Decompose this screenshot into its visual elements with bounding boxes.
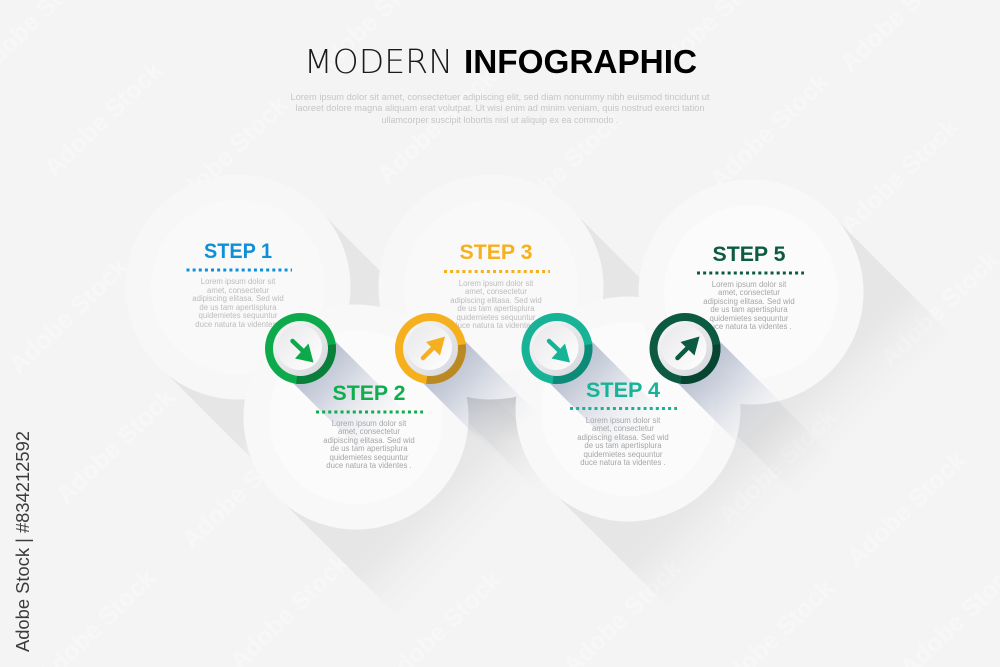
step 4 text xyxy=(570,379,677,467)
panel: step 1 circle xyxy=(126,174,350,400)
step 3 text: Lorem ipsum dolor sit xyxy=(459,279,534,288)
step 2 text: adipiscing elitasa. Sed wid xyxy=(323,436,415,445)
watermark pattern: Adobe Stock xyxy=(164,91,293,217)
step 5 text: Lorem ipsum dolor sit xyxy=(712,280,787,289)
step 1 text: de us tam apertisplura xyxy=(199,303,277,312)
title: MODERN xyxy=(304,42,453,81)
step 5 text: adipiscing elitasa. Sed wid xyxy=(703,297,795,306)
step 5 text: amet, consectetur xyxy=(718,288,780,297)
icon: step 3 yellow arrow button xyxy=(395,313,466,384)
step 2 text: amet, consectetur xyxy=(338,427,400,436)
step 4 text: Lorem ipsum dolor sit xyxy=(586,416,661,425)
subtitle text: Lorem ipsum dolor sit amet, consectetuer adipiscing elit, sed diam nonummy nibh euismod tincidunt ut xyxy=(290,92,710,102)
panel: step 2 circle xyxy=(244,304,468,530)
title: INFOGRAPHIC xyxy=(464,43,697,80)
step 2 text: STEP 2 xyxy=(332,382,406,405)
watermark pattern: Adobe Stock xyxy=(51,383,180,509)
step 3 text: duce natura ta videntes . xyxy=(453,321,539,330)
step 5 text: de us tam apertisplura xyxy=(710,305,788,314)
subtitle text: laoreet dolore magna aliquam erat volutpat. Ut wisi enim ad minim veniam, quis nostrud exerci tation xyxy=(296,103,704,113)
watermark pattern: Adobe Stock xyxy=(4,253,133,379)
panel: step 3 circle xyxy=(378,174,604,400)
subtitle text xyxy=(290,92,710,125)
step 3 text: STEP 3 xyxy=(460,241,532,264)
watermark pattern: Adobe Stock xyxy=(713,403,842,529)
step 1 text: adipiscing elitasa. Sed wid xyxy=(192,294,284,303)
step 4 text: adipiscing elitasa. Sed wid xyxy=(577,433,669,442)
step 4 text: duce natura ta videntes . xyxy=(580,458,666,467)
watermark pattern: Adobe Stock xyxy=(177,428,306,554)
vertical stock id text: Adobe Stock | #834212592 xyxy=(13,431,33,652)
panel: step 4 circle xyxy=(516,296,740,522)
watermark pattern: Adobe Stock xyxy=(705,68,834,194)
step 1 text: duce natura ta videntes . xyxy=(195,320,281,329)
step 1 text: Lorem ipsum dolor sit xyxy=(201,277,276,286)
icon: step 1 green arrow button xyxy=(265,313,336,384)
watermark pattern: Adobe Stock xyxy=(835,113,964,239)
step 2 text: quidemietes sequuntur xyxy=(330,453,409,462)
step 1 text xyxy=(186,240,292,329)
step 5 text xyxy=(697,243,804,331)
step 3 text: amet, consectetur xyxy=(465,287,527,296)
step 2 text: de us tam apertisplura xyxy=(330,444,408,453)
step 1 text: STEP 1 xyxy=(204,240,272,263)
step 4 text: quidemietes sequuntur xyxy=(584,450,663,459)
step 3 text: de us tam apertisplura xyxy=(457,304,535,313)
icon: step 5 dark green arrow button xyxy=(650,313,720,384)
step 2 text xyxy=(316,382,423,470)
title xyxy=(304,42,697,81)
step 4 text: de us tam apertisplura xyxy=(584,441,662,450)
step 3 text xyxy=(444,241,550,330)
panel: step 5 circle xyxy=(638,180,864,404)
step 5 text: quidemietes sequuntur xyxy=(710,314,789,323)
step 4 text: STEP 4 xyxy=(586,379,660,402)
step 5 text: STEP 5 xyxy=(712,243,786,266)
step 4 text: amet, consectetur xyxy=(592,424,654,433)
watermark pattern: Adobe Stock xyxy=(372,63,501,189)
long shadows behind circles xyxy=(159,208,961,627)
step 1 text: amet, consectetur xyxy=(207,286,269,295)
step 2 text: duce natura ta videntes . xyxy=(326,461,412,470)
step 2 text: Lorem ipsum dolor sit xyxy=(332,419,407,428)
step 5 text: duce natura ta videntes . xyxy=(706,322,792,331)
long shadows behind arrow buttons xyxy=(280,328,794,458)
subtitle text: ullamcorper suscipit lobortis nisl ut aliquip ex ea commodo . xyxy=(382,115,618,125)
step 3 text: adipiscing elitasa. Sed wid xyxy=(450,296,542,305)
step 3 text: quidemietes sequuntur xyxy=(457,313,536,322)
watermark pattern: Adobe Stock xyxy=(39,56,168,182)
watermark pattern: Adobe Stock xyxy=(498,106,627,232)
watermark pattern: Adobe Stock xyxy=(842,446,971,572)
icon: step 4 teal arrow button xyxy=(522,313,592,384)
step 1 text: quidemietes sequuntur xyxy=(199,311,278,320)
